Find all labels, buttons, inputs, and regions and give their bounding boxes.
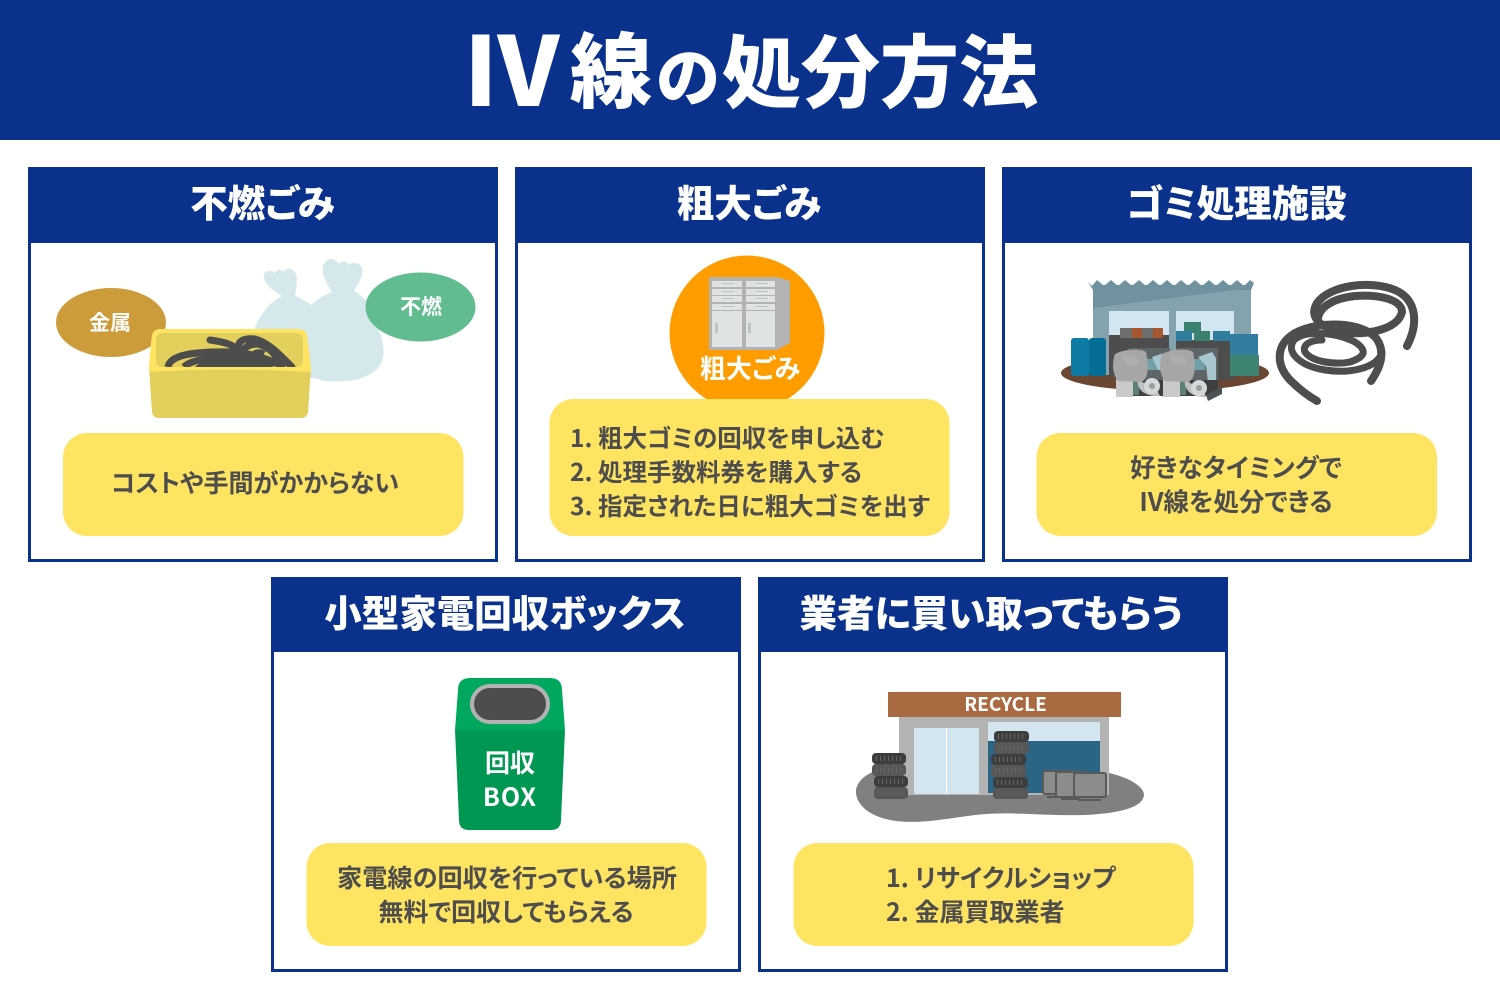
title: 処分方法	[722, 9, 1038, 124]
machine right	[1160, 348, 1222, 401]
icon: coiled cable	[1280, 285, 1414, 401]
text box: 好きなタイミングで	[1130, 448, 1342, 485]
icon: yellow box with cable	[149, 329, 311, 418]
icon: recycle shop: RECYCLE	[964, 690, 1047, 717]
text box: コストや手間がかからない	[111, 464, 399, 500]
machine left	[1113, 348, 1170, 397]
text box: 3. 指定された日に粗大ゴミを出す	[570, 488, 930, 523]
title: の	[656, 28, 720, 120]
text box	[550, 399, 950, 536]
icon: green collection box	[455, 678, 565, 830]
icon: green collection box: BOX	[483, 778, 537, 814]
label: 金属: 金属	[89, 307, 131, 337]
title banner	[0, 0, 1500, 140]
text box: 1. 粗大ゴミの回収を申し込む	[570, 420, 885, 455]
icon: monitors	[1043, 771, 1106, 800]
panel: ゴミ処理施設	[1002, 167, 1472, 560]
icon: tyre stacks	[872, 731, 1029, 799]
heading: 小型家電回収ボックス: 小型家電回収ボックス	[324, 583, 686, 638]
text box	[306, 843, 706, 946]
text box	[794, 843, 1194, 946]
panel: 粗大ごみ	[515, 167, 985, 560]
heading: 業者に買い取ってもらう: 業者に買い取ってもらう	[800, 583, 1182, 638]
label: 不燃: 不燃	[400, 291, 442, 321]
text box	[63, 433, 464, 536]
heading: 粗大ごみ: 粗大ごみ	[677, 173, 821, 228]
text box	[1036, 433, 1437, 536]
label: 金属	[56, 288, 166, 357]
label: 不燃	[366, 272, 476, 342]
icon: orange circle with cabinet	[670, 256, 824, 410]
icon: orange circle with cabinet: 粗大ごみ	[700, 349, 800, 386]
text box: 1. リサイクルショップ	[886, 859, 1117, 895]
icon: processing facility	[1061, 280, 1269, 401]
text box: 無料で回収してもらえる	[378, 893, 634, 929]
heading: ゴミ処理施設: ゴミ処理施設	[1126, 173, 1347, 228]
text box: 2. 金属買取業者	[886, 893, 1065, 929]
icon: recycle shop	[856, 690, 1144, 822]
icon: green collection box: 回収	[485, 744, 535, 780]
text box: IV線を処分できる	[1139, 482, 1333, 519]
title: 線	[570, 6, 652, 125]
heading: 不燃ごみ: 不燃ごみ	[190, 173, 335, 228]
panel: 小型家電回収ボックス	[271, 577, 741, 970]
panel: 業者に買い取ってもらう	[758, 577, 1228, 970]
icon: garbage bags	[250, 259, 384, 382]
panel: 不燃ごみ	[28, 167, 498, 560]
text box: 家電線の回収を行っている場所	[337, 859, 677, 895]
text box: 2. 処理手数料券を購入する	[570, 454, 862, 489]
